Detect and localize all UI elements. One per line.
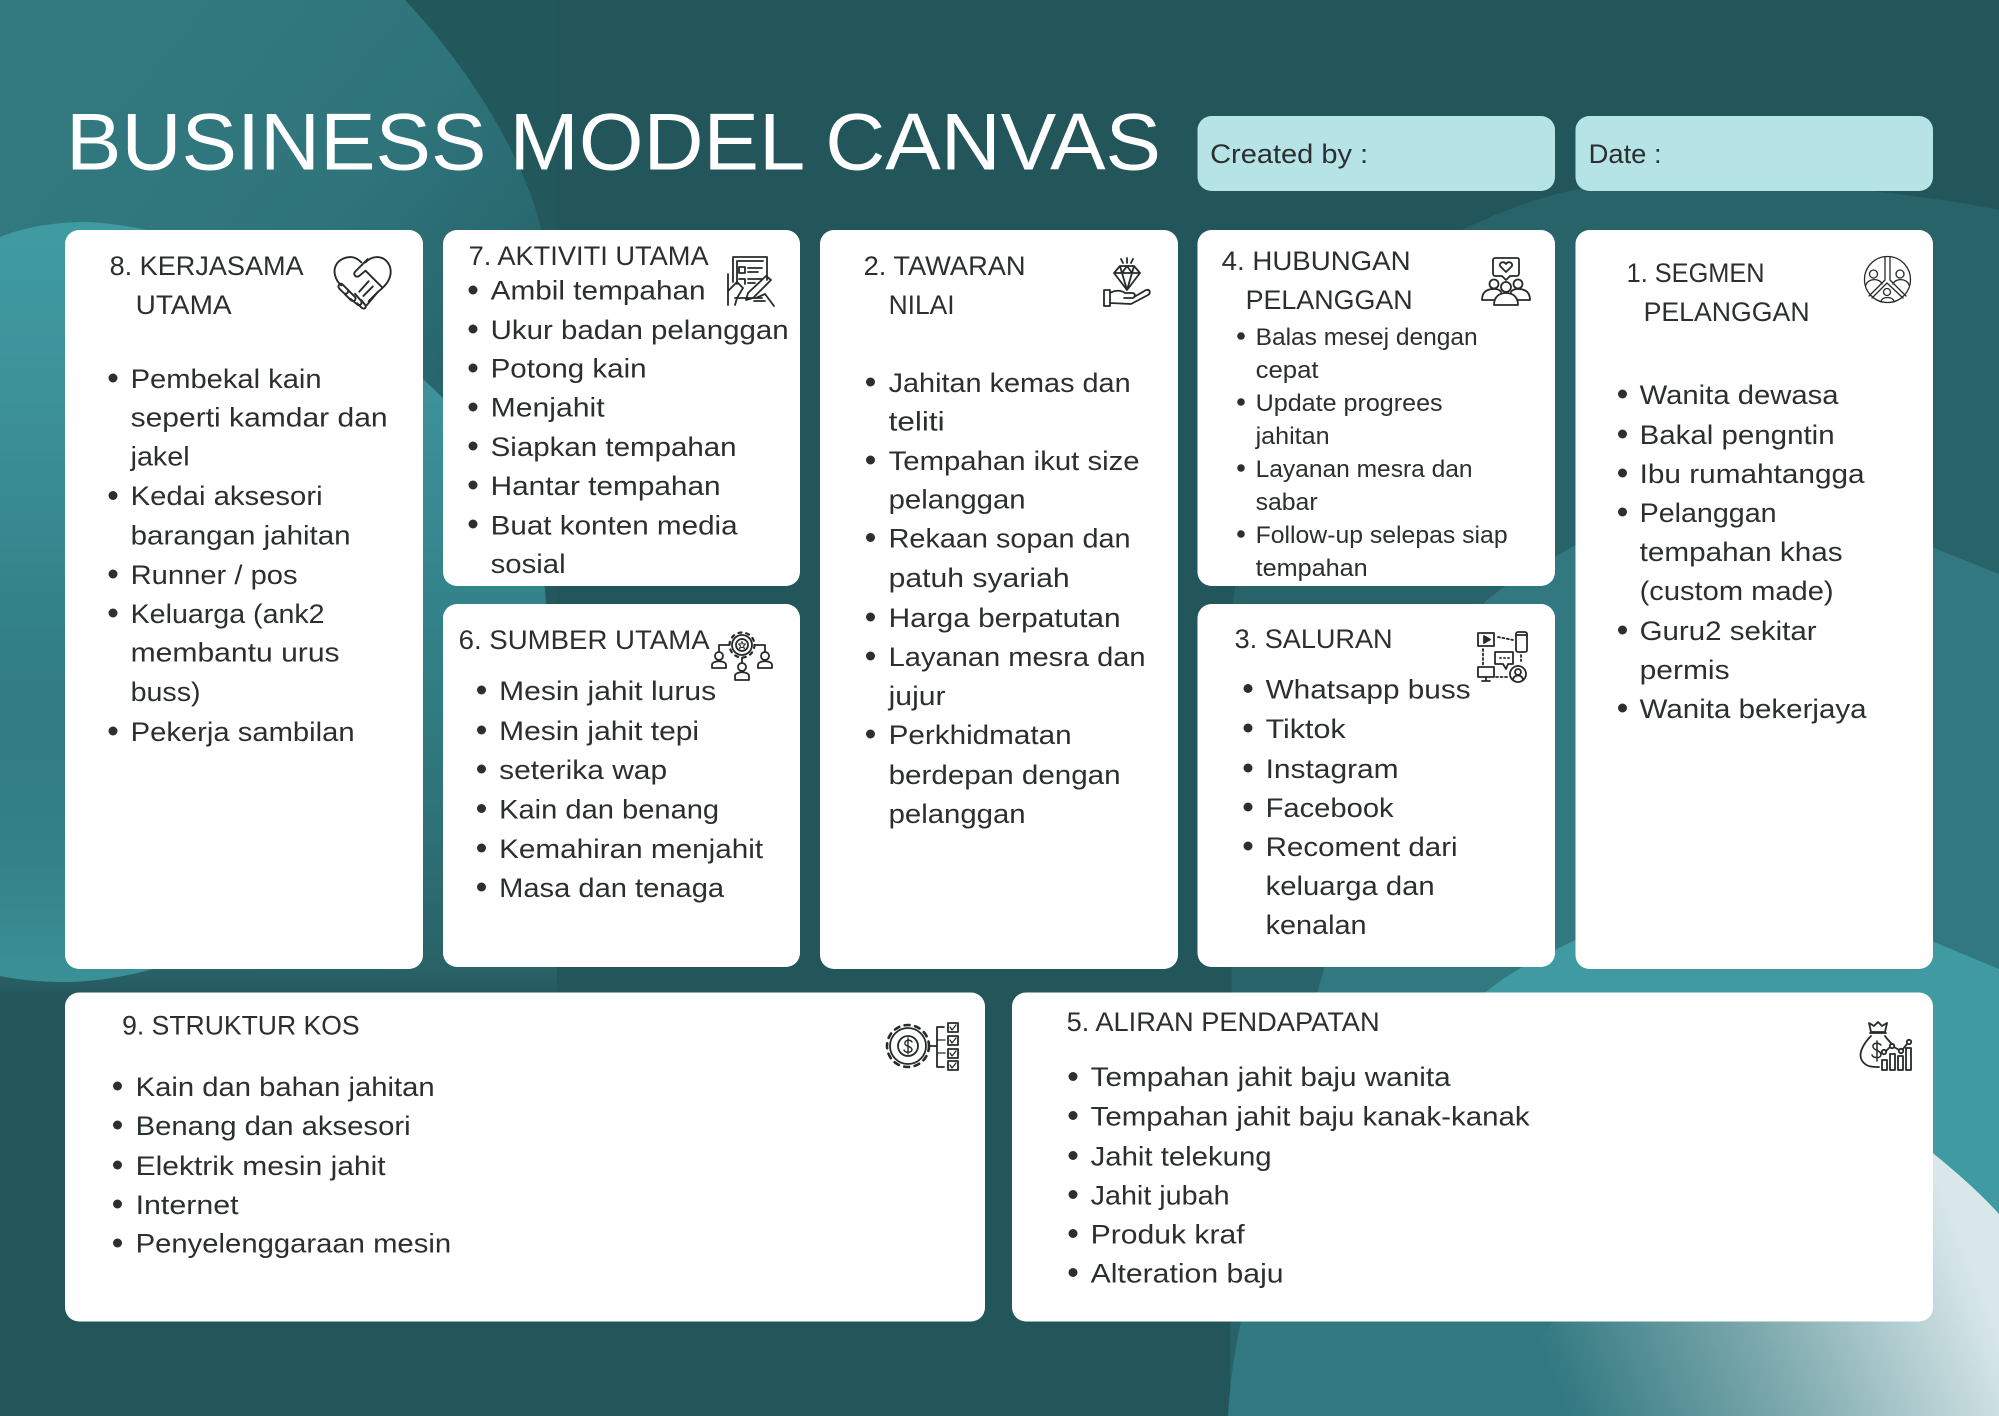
list: teliti bbox=[889, 406, 945, 436]
list: Siapkan tempahan bbox=[491, 432, 737, 462]
list: Produk kraf bbox=[1091, 1220, 1245, 1250]
list: Menjahit bbox=[491, 392, 605, 422]
list bbox=[108, 364, 388, 747]
list: jahitan bbox=[1255, 423, 1330, 450]
list: Recoment dari bbox=[1266, 832, 1458, 862]
list: Alteration baju bbox=[1091, 1258, 1284, 1288]
heading bbox=[110, 251, 304, 320]
list: Tempahan ikut size bbox=[889, 446, 1140, 476]
list: Guru2 sekitar bbox=[1640, 616, 1817, 646]
heading: 2. TAWARAN bbox=[864, 251, 1026, 281]
icon: money bag and growth chart bbox=[1861, 1022, 1911, 1070]
list: pelanggan bbox=[889, 484, 1026, 514]
list: Wanita dewasa bbox=[1640, 380, 1840, 410]
list: membantu urus bbox=[131, 638, 340, 668]
list: Kemahiran menjahit bbox=[499, 834, 764, 864]
list: Potong kain bbox=[491, 354, 647, 384]
list: Kedai aksesori bbox=[131, 481, 323, 511]
list: Jahit jubah bbox=[1091, 1180, 1230, 1210]
heading bbox=[1627, 258, 1810, 327]
list: kenalan bbox=[1266, 910, 1367, 940]
heading: 8. KERJASAMA bbox=[110, 251, 304, 281]
field: date bbox=[1576, 116, 1933, 191]
list: Kain dan bahan jahitan bbox=[136, 1072, 435, 1102]
heading: 9. STRUKTUR KOS bbox=[122, 1010, 360, 1040]
list: patuh syariah bbox=[889, 563, 1070, 593]
panel: 9 Struktur Kos bbox=[65, 992, 985, 1322]
heading: 7. AKTIVITI UTAMA bbox=[469, 241, 709, 271]
heading: NILAI bbox=[889, 290, 955, 320]
list: Tempahan jahit baju kanak-kanak bbox=[1091, 1102, 1530, 1132]
list: Update progrees bbox=[1256, 390, 1443, 417]
list: Keluarga (ank2 bbox=[131, 599, 325, 629]
icon: handshake heart bbox=[335, 257, 391, 309]
list: seterika wap bbox=[499, 755, 667, 785]
list bbox=[113, 1072, 451, 1258]
panel: 1 Segmen Pelanggan bbox=[1576, 230, 1933, 969]
list: keluarga dan bbox=[1266, 871, 1435, 901]
list: sabar bbox=[1256, 489, 1318, 516]
icon: diamond in hand bbox=[1104, 258, 1150, 306]
panel: 3 Saluran bbox=[1198, 604, 1555, 967]
list: Ukur badan pelanggan bbox=[491, 315, 789, 345]
list: Tiktok bbox=[1266, 714, 1346, 744]
heading: 3. SALURAN bbox=[1235, 624, 1393, 654]
panel: 7 Aktiviti Utama bbox=[443, 230, 800, 586]
list: barangan jahitan bbox=[131, 520, 351, 550]
list: jakel bbox=[130, 442, 190, 472]
field: created by bbox=[1198, 116, 1555, 191]
list: Pelanggan bbox=[1640, 498, 1777, 528]
list: Whatsapp buss bbox=[1266, 674, 1471, 704]
heading: UTAMA bbox=[136, 290, 232, 320]
icon: people with heart bubble bbox=[1482, 258, 1530, 305]
list: permis bbox=[1640, 655, 1730, 685]
heading bbox=[864, 251, 1026, 320]
list: Masa dan tenaga bbox=[499, 873, 725, 903]
list: tempahan bbox=[1256, 555, 1368, 582]
list bbox=[1244, 674, 1471, 940]
heading: PELANGGAN bbox=[1644, 297, 1810, 327]
list: Hantar tempahan bbox=[491, 471, 721, 501]
list: Elektrik mesin jahit bbox=[136, 1151, 386, 1181]
field: created by: Created by : bbox=[1210, 139, 1368, 169]
list: Jahit telekung bbox=[1091, 1142, 1272, 1172]
list: Benang dan aksesori bbox=[136, 1111, 411, 1141]
list bbox=[1618, 380, 1868, 724]
list bbox=[468, 276, 789, 579]
list: Ambil tempahan bbox=[491, 276, 706, 306]
list bbox=[1068, 1062, 1530, 1288]
list: cepat bbox=[1256, 357, 1319, 384]
list: Follow-up selepas siap bbox=[1256, 522, 1508, 549]
list: Balas mesej dengan bbox=[1256, 324, 1478, 351]
list: Bakal pengntin bbox=[1640, 420, 1835, 450]
heading: 5. ALIRAN PENDAPATAN bbox=[1067, 1007, 1380, 1037]
list: Facebook bbox=[1266, 793, 1394, 823]
list: berdepan dengan bbox=[889, 760, 1121, 790]
list: Internet bbox=[136, 1190, 239, 1220]
panel: 5 Aliran Pendapatan bbox=[1012, 992, 1933, 1322]
title: BUSINESS MODEL CANVAS bbox=[66, 98, 1161, 188]
list: Layanan mesra dan bbox=[1256, 456, 1473, 483]
list: Runner / pos bbox=[131, 560, 298, 590]
icon: segmented circle of people bbox=[1864, 256, 1910, 302]
list: Harga berpatutan bbox=[889, 603, 1121, 633]
list bbox=[1237, 324, 1508, 582]
list: Mesin jahit tepi bbox=[499, 716, 699, 746]
list: Pekerja sambilan bbox=[131, 717, 355, 747]
list: Rekaan sopan dan bbox=[889, 524, 1131, 554]
panel: 6 Sumber Utama bbox=[443, 604, 800, 967]
list: Jahitan kemas dan bbox=[889, 368, 1131, 398]
heading bbox=[1222, 246, 1413, 315]
list: Buat konten media bbox=[491, 510, 739, 540]
list: Wanita bekerjaya bbox=[1640, 694, 1868, 724]
list: sosial bbox=[491, 549, 566, 579]
field: date: Date : bbox=[1589, 139, 1662, 169]
heading: 6. SUMBER UTAMA bbox=[459, 625, 710, 655]
list: Mesin jahit lurus bbox=[499, 676, 716, 706]
list: (custom made) bbox=[1640, 576, 1834, 606]
list: Instagram bbox=[1266, 754, 1399, 784]
list: Tempahan jahit baju wanita bbox=[1091, 1062, 1452, 1092]
icon: checklist and pen bbox=[728, 257, 774, 306]
list: tempahan khas bbox=[1640, 537, 1843, 567]
panel: 8 Kerjasama Utama bbox=[65, 230, 423, 969]
list: pelanggan bbox=[889, 799, 1026, 829]
heading: PELANGGAN bbox=[1246, 285, 1413, 315]
list bbox=[477, 676, 764, 903]
list: buss) bbox=[131, 677, 201, 707]
list: Perkhidmatan bbox=[889, 720, 1072, 750]
list: seperti kamdar dan bbox=[131, 402, 388, 432]
icon: dollar gear and checklist bbox=[887, 1023, 958, 1070]
icon: gear and people bbox=[712, 632, 772, 680]
list: Layanan mesra dan bbox=[889, 642, 1146, 672]
list: Kain dan benang bbox=[499, 794, 719, 824]
heading: 4. HUBUNGAN bbox=[1222, 246, 1411, 276]
list: Ibu rumahtangga bbox=[1640, 459, 1866, 489]
list: Penyelenggaraan mesin bbox=[136, 1228, 451, 1258]
list bbox=[866, 368, 1146, 829]
list: jujur bbox=[887, 681, 946, 711]
heading: 1. SEGMEN bbox=[1627, 258, 1765, 288]
panel: 2 Tawaran Nilai bbox=[820, 230, 1178, 969]
icon: digital channels bbox=[1478, 632, 1527, 682]
list: Pembekal kain bbox=[131, 364, 322, 394]
panel: 4 Hubungan Pelanggan bbox=[1198, 230, 1555, 586]
